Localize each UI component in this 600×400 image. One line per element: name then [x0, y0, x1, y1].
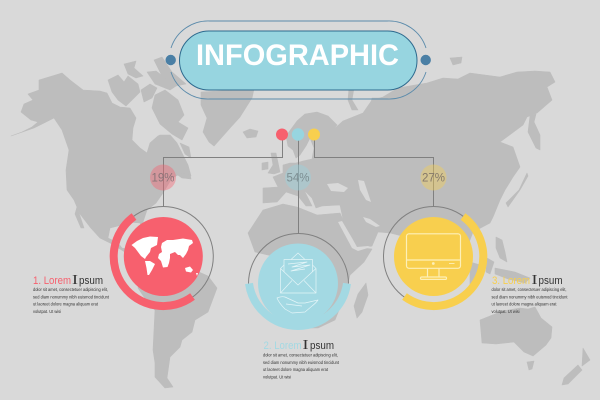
body 2: ut laoreet dolore magna aliquam erat	[263, 367, 329, 373]
body 1: ut laoreet dolore magna aliquam erat	[33, 302, 99, 308]
text block 3: I	[532, 273, 538, 288]
title pill	[180, 31, 417, 90]
title text: INFOGRAPHIC	[196, 39, 399, 72]
percentage badge 54%: 54%	[286, 172, 310, 184]
text block 2	[263, 338, 340, 380]
body 2	[263, 353, 340, 380]
panel: blue envelope circle	[248, 234, 348, 326]
blue disc	[258, 244, 338, 324]
percentage badge 27%: 27%	[422, 172, 445, 184]
body 2: dolor sit amet, consectetuer adipiscing elit,	[263, 353, 338, 359]
panel: red world circle	[113, 206, 213, 306]
heading 3: 3. Lorem	[492, 275, 530, 287]
body 1: volutpat. Ut wisi	[33, 309, 61, 315]
blue arc	[249, 284, 347, 326]
icon: desktop monitor	[406, 234, 460, 279]
title right dot	[420, 55, 431, 65]
red disc	[124, 217, 203, 296]
body 3: ut laoreet dolore magna aliquam erat	[492, 302, 557, 308]
body 2: sed diam nonummy nibh euismod tincidunt	[263, 360, 340, 366]
text block 3: psum	[538, 275, 562, 287]
thin ring	[384, 206, 484, 306]
percentage badge 54%	[285, 164, 311, 190]
thin ring	[113, 206, 213, 306]
icon: white world map	[132, 236, 198, 276]
text block 2: I	[302, 338, 309, 353]
yellow arc	[404, 216, 483, 306]
body 3: dolor sit amet, consectetuer adipiscing elit,	[492, 287, 566, 293]
percentage badge 19%: 19%	[151, 172, 175, 184]
yellow disc	[394, 217, 473, 296]
panel: yellow monitor circle	[384, 206, 484, 306]
text block 1: I	[72, 273, 78, 288]
text block 3	[492, 273, 568, 315]
top colored dots	[276, 128, 320, 141]
body 3	[492, 287, 568, 315]
body 1	[33, 287, 110, 315]
world map background	[11, 57, 590, 388]
connector lines	[164, 138, 434, 234]
title left dot	[166, 55, 176, 65]
body 3: sed diam nonummy nibh euismod tincidunt	[492, 294, 568, 300]
title outer frame	[171, 21, 426, 99]
body 3: volutpat. Ut wisi	[492, 309, 520, 315]
percentage badge 27%	[420, 164, 446, 190]
text block 2: psum	[310, 340, 334, 352]
heading 1: 1. Lorem	[33, 275, 71, 287]
percentage badge 19%	[150, 164, 176, 190]
sea cut-outs on map	[327, 180, 380, 251]
body 1: sed diam nonummy nibh euismod tincidunt	[33, 294, 110, 300]
icon: open envelope and hand	[277, 253, 318, 313]
text block 1	[33, 273, 110, 315]
body 2: volutpat. Ut wisi	[263, 374, 291, 380]
thin ring	[248, 234, 348, 284]
red arc	[114, 216, 192, 306]
heading 2: 2. Lorem	[264, 340, 302, 352]
body 1: dolor sit amet, consectetuer adipiscing elit,	[33, 287, 108, 293]
title banner	[166, 21, 431, 99]
text block 1: psum	[79, 275, 103, 287]
